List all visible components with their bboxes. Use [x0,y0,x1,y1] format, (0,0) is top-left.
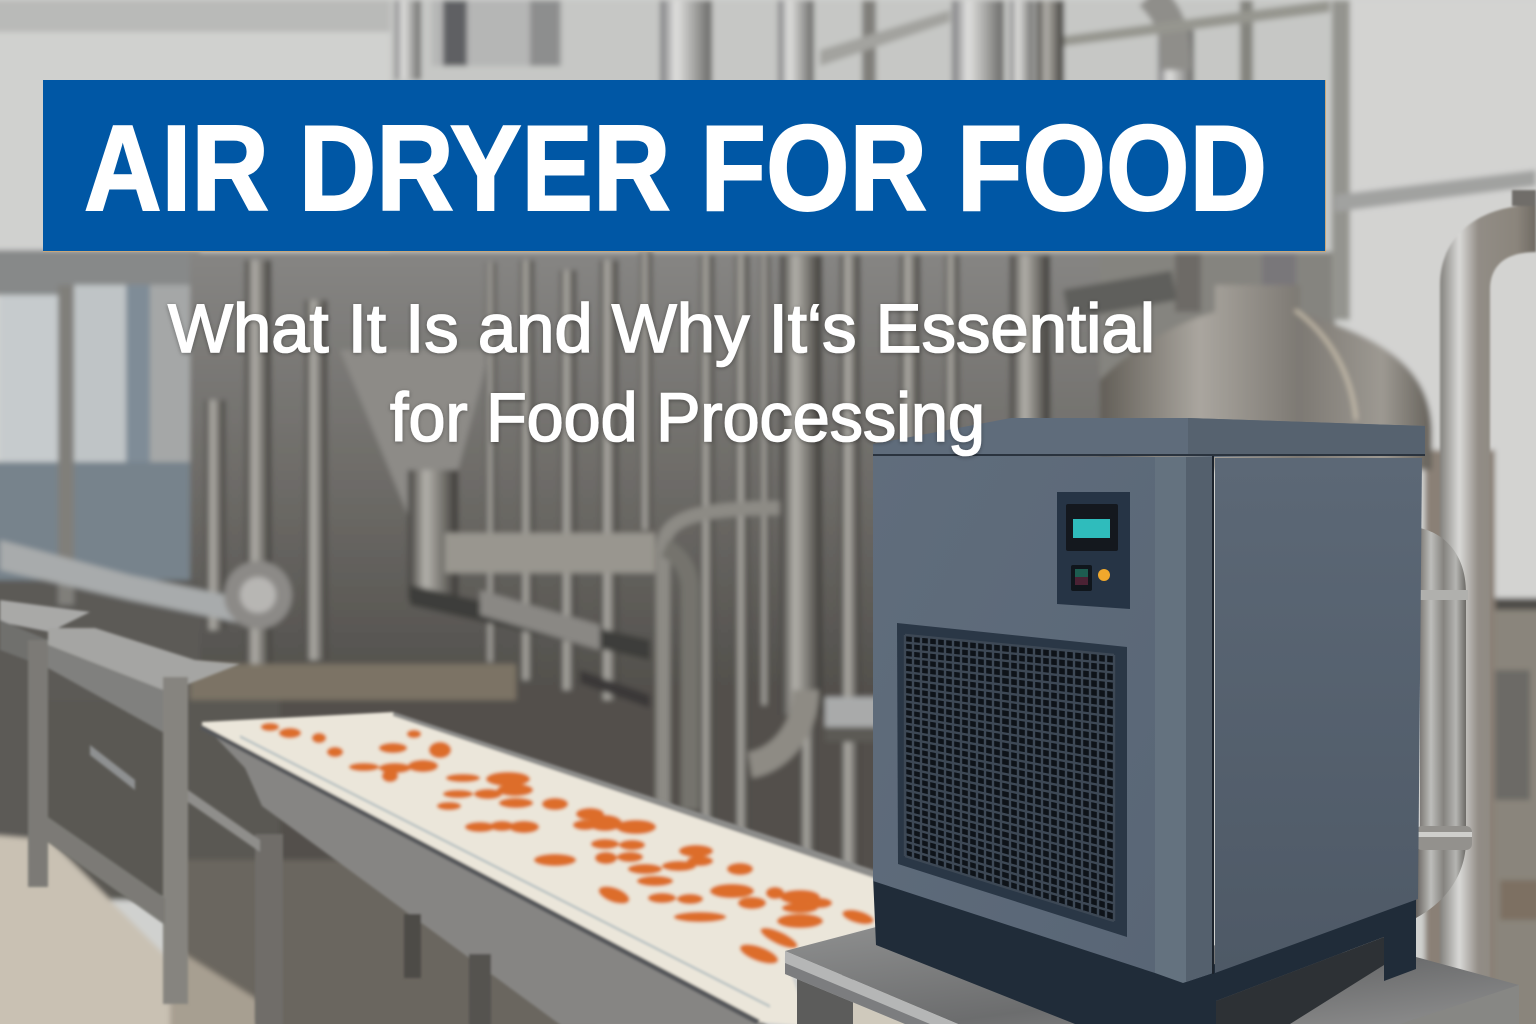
machinery verticals [58,285,74,605]
dryer lid [873,418,1425,457]
indicator light [1098,569,1110,581]
display [1066,504,1118,551]
dryer corner column [1155,457,1213,983]
upper conveyor table [0,600,90,632]
machinery horizontals [445,533,655,573]
table legs [797,975,853,1024]
dryer front panel [873,455,1155,973]
dryer side panel [1215,458,1422,973]
teal screen [1073,519,1110,538]
table top [785,926,1519,1024]
switch [1071,565,1092,591]
belt surface [202,712,880,1024]
conveyor legs and shelves [28,640,491,1024]
food pieces [261,723,875,967]
subtitle [168,290,1155,456]
title banner [43,80,1326,252]
belt remnant beside table legs [853,990,913,1024]
tank [1175,252,1201,312]
conveyor side panel [205,726,770,1024]
steel table under dryer [785,926,1519,1024]
air dryer unit [873,418,1425,1024]
large stainless pipe at right [1440,190,1536,990]
ventilation grille [897,623,1127,937]
subtitle: for Food Processing [390,379,985,456]
control panel [1057,492,1130,609]
pipe loop behind dryer [1416,528,1472,918]
conveyor belt with food pieces [0,600,880,1024]
table front edge [785,951,958,1024]
dryer base [873,876,1416,1024]
title text: AIR DRYER FOR FOOD [84,100,1267,236]
subtitle: What It Is and Why It‘s Essential [168,290,1155,367]
top pipes [395,0,421,80]
